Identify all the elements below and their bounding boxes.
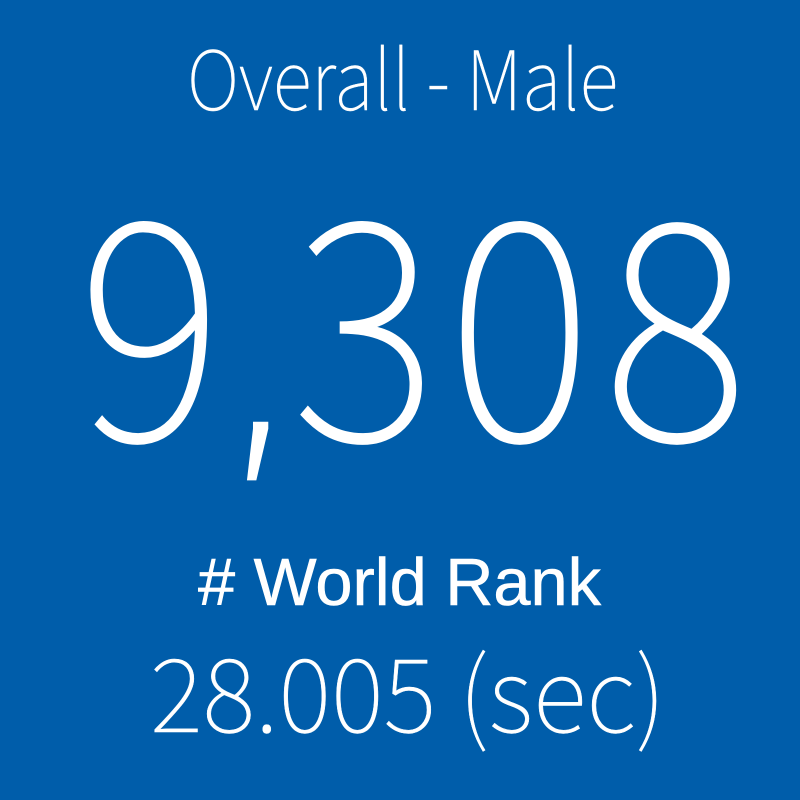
value: 28.005 (sec): 28.005 (sec) xyxy=(150,615,666,762)
big number: 9,308: 3 xyxy=(292,99,437,526)
big number: 9,308: 9 xyxy=(78,99,222,526)
big number: 9,308: 0 xyxy=(447,99,592,526)
big number: 9,308: 8 xyxy=(603,99,748,526)
big number: 9,308: , xyxy=(211,136,310,520)
heading: Overall - Male: Overall - Male xyxy=(187,15,618,134)
label: # World Rank: # World Rank xyxy=(198,545,601,620)
